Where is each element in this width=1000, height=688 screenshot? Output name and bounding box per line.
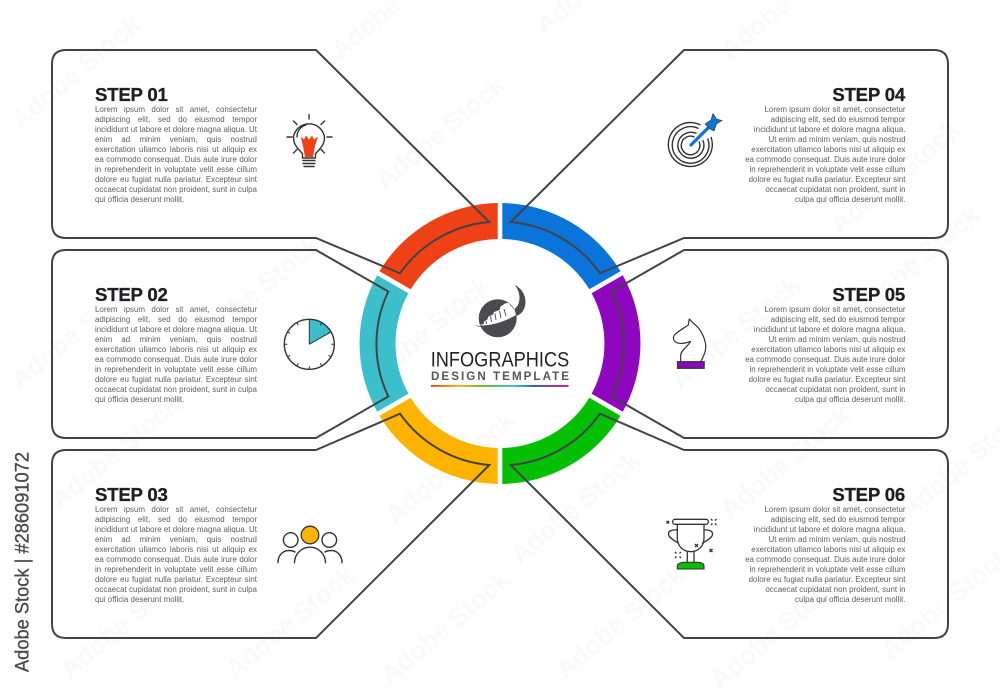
text block: step 06: Ut enim ad minim veniam, quis nostrud: [768, 534, 905, 544]
text block: step 03: exercitation ullamco laboris nisi ut aliquip ex: [95, 544, 257, 554]
icon: chess knight: [673, 319, 706, 368]
text block: step 02: exercitation ullamco laboris nisi ut aliquip ex: [95, 344, 257, 354]
rainbow underline: [431, 385, 568, 387]
title: infographics: INFOGRAPHICS: [431, 347, 569, 372]
text block: step 04: culpa qui officia deserunt mollit.: [795, 194, 905, 204]
text block: step 06: incididunt ut labore et dolore magna aliqua.: [753, 524, 905, 534]
text block: step 02: in reprehenderit in voluptate velit esse cillum: [95, 364, 257, 374]
text block: step 03: enim ad minim veniam, quis nostrud: [95, 534, 257, 544]
text block: step 04: [745, 104, 906, 204]
text: Adobe Stock: [370, 69, 511, 195]
text block: step 05: incididunt ut labore et dolore magna aliqua.: [753, 324, 905, 334]
subtitle: design template: DESIGN TEMPLATE: [431, 370, 569, 383]
text: Adobe Stock: [5, 9, 146, 135]
segment: step 03 orange: [380, 398, 498, 484]
text block: step 02: occaecat cupidatat non proident, sunt in culpa: [95, 384, 257, 394]
stock image credit: Adobe Stock | #286091072: [12, 452, 34, 672]
text: Adobe Stock: [5, 269, 146, 395]
text block: step 03: [95, 504, 257, 604]
text block: step 06: Lorem ipsum dolor sit amet, consectetur: [764, 504, 905, 514]
text: Adobe Stock: [375, 564, 516, 688]
text block: step 03: qui officia deserunt mollit.: [95, 594, 184, 604]
text block: step 05: [745, 304, 906, 404]
text: Adobe Stock: [380, 404, 521, 530]
text: Adobe Stock: [665, 269, 806, 395]
text block: step 03: dolore eu fugiat nulla pariatur. Excepteur sint: [95, 574, 257, 584]
text: Adobe Stock: [45, 389, 186, 515]
text block: step 03: Lorem ipsum dolor sit amet, consectetur: [95, 504, 257, 514]
heading: step 06: STEP 06: [832, 484, 905, 505]
segment: step 02 teal: [360, 275, 408, 412]
logo: globe with swoosh: [474, 285, 526, 337]
segment: step 06 green: [502, 398, 620, 484]
panel: step 02: [51, 249, 390, 439]
text block: step 05: adipiscing elit, sed do eiusmod tempor: [770, 314, 905, 324]
text block: step 05: culpa qui officia deserunt mollit.: [795, 394, 905, 404]
panel outline: [52, 250, 388, 438]
text block: step 04: in reprehenderit in voluptate velit esse cillum: [749, 164, 905, 174]
text block: step 01: incididunt ut labore et dolore magna aliqua. Ut: [95, 124, 257, 134]
icon: target with dart: [668, 114, 722, 167]
panel: step 01: [51, 49, 492, 274]
text block: step 01: Lorem ipsum dolor sit amet, consectetur: [95, 104, 257, 114]
text block: step 02: ea commodo consequat. Duis aute irure dolor: [95, 354, 257, 364]
text block: step 06: ea commodo consequat. Duis aute irure dolor: [745, 554, 905, 564]
text block: step 01: [95, 104, 257, 204]
text block: step 06: occaecat cupidatat non proident, sunt in: [765, 584, 905, 594]
icon: trophy: [666, 519, 716, 569]
text: Adobe Stock: [825, 114, 966, 240]
text block: step 06: dolore eu fugiat nulla pariatur. Excepteur sint: [748, 574, 905, 584]
text: Adobe Stock: [355, 269, 496, 395]
text block: step 03: occaecat cupidatat non proident, sunt in culpa: [95, 584, 257, 594]
text: Adobe Stock: [220, 559, 361, 685]
text block: step 05: exercitation ullamco laboris nisi ut aliquip ex: [751, 344, 905, 354]
text block: step 04: occaecat cupidatat non proident, sunt in: [765, 184, 905, 194]
text block: step 05: Ut enim ad minim veniam, quis nostrud: [768, 334, 905, 344]
text block: step 05: in reprehenderit in voluptate velit esse cillum: [749, 364, 905, 374]
text block: step 04: adipiscing elit, sed do eiusmod tempor: [770, 114, 905, 124]
text block: step 03: in reprehenderit in voluptate velit esse cillum: [95, 564, 257, 574]
panel outline: [511, 414, 948, 638]
segment: step 01 red: [380, 203, 498, 289]
panel: step 05: [610, 249, 949, 439]
text block: step 04: dolore eu fugiat nulla pariatur. Excepteur sint: [748, 174, 905, 184]
text block: step 06: culpa qui officia deserunt mollit.: [795, 594, 905, 604]
text: Adobe Stock: [715, 399, 856, 525]
text: Adobe Stock: [845, 199, 986, 325]
text block: step 02: enim ad minim veniam, quis nostrud: [95, 334, 257, 344]
text block: step 01: qui officia deserunt mollit.: [95, 194, 184, 204]
text block: step 02: adipiscing elit, sed do eiusmod tempor: [95, 314, 257, 324]
text block: step 01: occaecat cupidatat non proident, sunt in culpa: [95, 184, 257, 194]
text: Adobe Stock: [55, 559, 196, 685]
text: Adobe Stock: [185, 229, 326, 355]
text block: step 01: exercitation ullamco laboris nisi ut aliquip ex: [95, 144, 257, 154]
text block: step 06: [745, 504, 906, 604]
panel: step 03: [51, 412, 492, 639]
text block: step 03: adipiscing elit, sed do eiusmod tempor: [95, 514, 257, 524]
text block: step 02: incididunt ut labore et dolore magna aliqua. Ut: [95, 324, 257, 334]
icon: team of three people: [278, 526, 342, 563]
text: Adobe Stock: [505, 444, 646, 570]
text block: step 06: in reprehenderit in voluptate velit esse cillum: [749, 564, 905, 574]
segment: step 05 purple: [592, 275, 640, 412]
text block: step 05: occaecat cupidatat non proident, sunt in: [765, 384, 905, 394]
panel outline: [52, 50, 489, 273]
panel outline: [612, 250, 948, 438]
panel outline: [52, 414, 489, 638]
text: Adobe Stock: [550, 559, 691, 685]
text block: step 05: Lorem ipsum dolor sit amet, consectetur: [764, 304, 905, 314]
text block: step 05: dolore eu fugiat nulla pariatur. Excepteur sint: [748, 374, 905, 384]
heading: step 03: STEP 03: [95, 484, 168, 505]
icon: clock: [284, 319, 334, 369]
text block: step 06: exercitation ullamco laboris nisi ut aliquip ex: [751, 544, 905, 554]
heading: step 01: STEP 01: [95, 84, 168, 105]
text block: step 04: incididunt ut labore et dolore magna aliqua.: [753, 124, 905, 134]
text block: step 02: dolore eu fugiat nulla pariatur. Excepteur sint: [95, 374, 257, 384]
text block: step 01: adipiscing elit, sed do eiusmod tempor: [95, 114, 257, 124]
heading: step 05: STEP 05: [832, 284, 905, 305]
text block: step 01: ea commodo consequat. Duis aute irure dolor: [95, 154, 257, 164]
icon: light bulb: [287, 114, 332, 166]
text block: step 01: enim ad minim veniam, quis nostrud: [95, 134, 257, 144]
text block: step 03: incididunt ut labore et dolore magna aliqua. Ut: [95, 524, 257, 534]
text block: step 04: Ut enim ad minim veniam, quis nostrud: [768, 134, 905, 144]
text block: step 01: in reprehenderit in voluptate velit esse cillum: [95, 164, 257, 174]
text block: step 02: qui officia deserunt mollit.: [95, 394, 184, 404]
panel: step 04: [508, 49, 949, 274]
text block: step 02: Lorem ipsum dolor sit amet, consectetur: [95, 304, 257, 314]
text block: step 04: Lorem ipsum dolor sit amet, consectetur: [764, 104, 905, 114]
panel: step 06: [508, 412, 949, 639]
text block: step 06: adipiscing elit, sed do eiusmod tempor: [770, 514, 905, 524]
text block: step 04: ea commodo consequat. Duis aute irure dolor: [745, 154, 905, 164]
panel outline: [511, 50, 948, 273]
text block: step 02: [95, 304, 257, 404]
text block: step 01: dolore eu fugiat nulla pariatur. Excepteur sint: [95, 174, 257, 184]
text block: step 05: ea commodo consequat. Duis aute irure dolor: [745, 354, 905, 364]
text block: step 04: exercitation ullamco laboris nisi ut aliquip ex: [751, 144, 905, 154]
heading: step 04: STEP 04: [832, 84, 905, 105]
text block: step 03: ea commodo consequat. Duis aute irure dolor: [95, 554, 257, 564]
heading: step 02: STEP 02: [95, 284, 168, 305]
segment: step 04 blue: [502, 203, 620, 289]
